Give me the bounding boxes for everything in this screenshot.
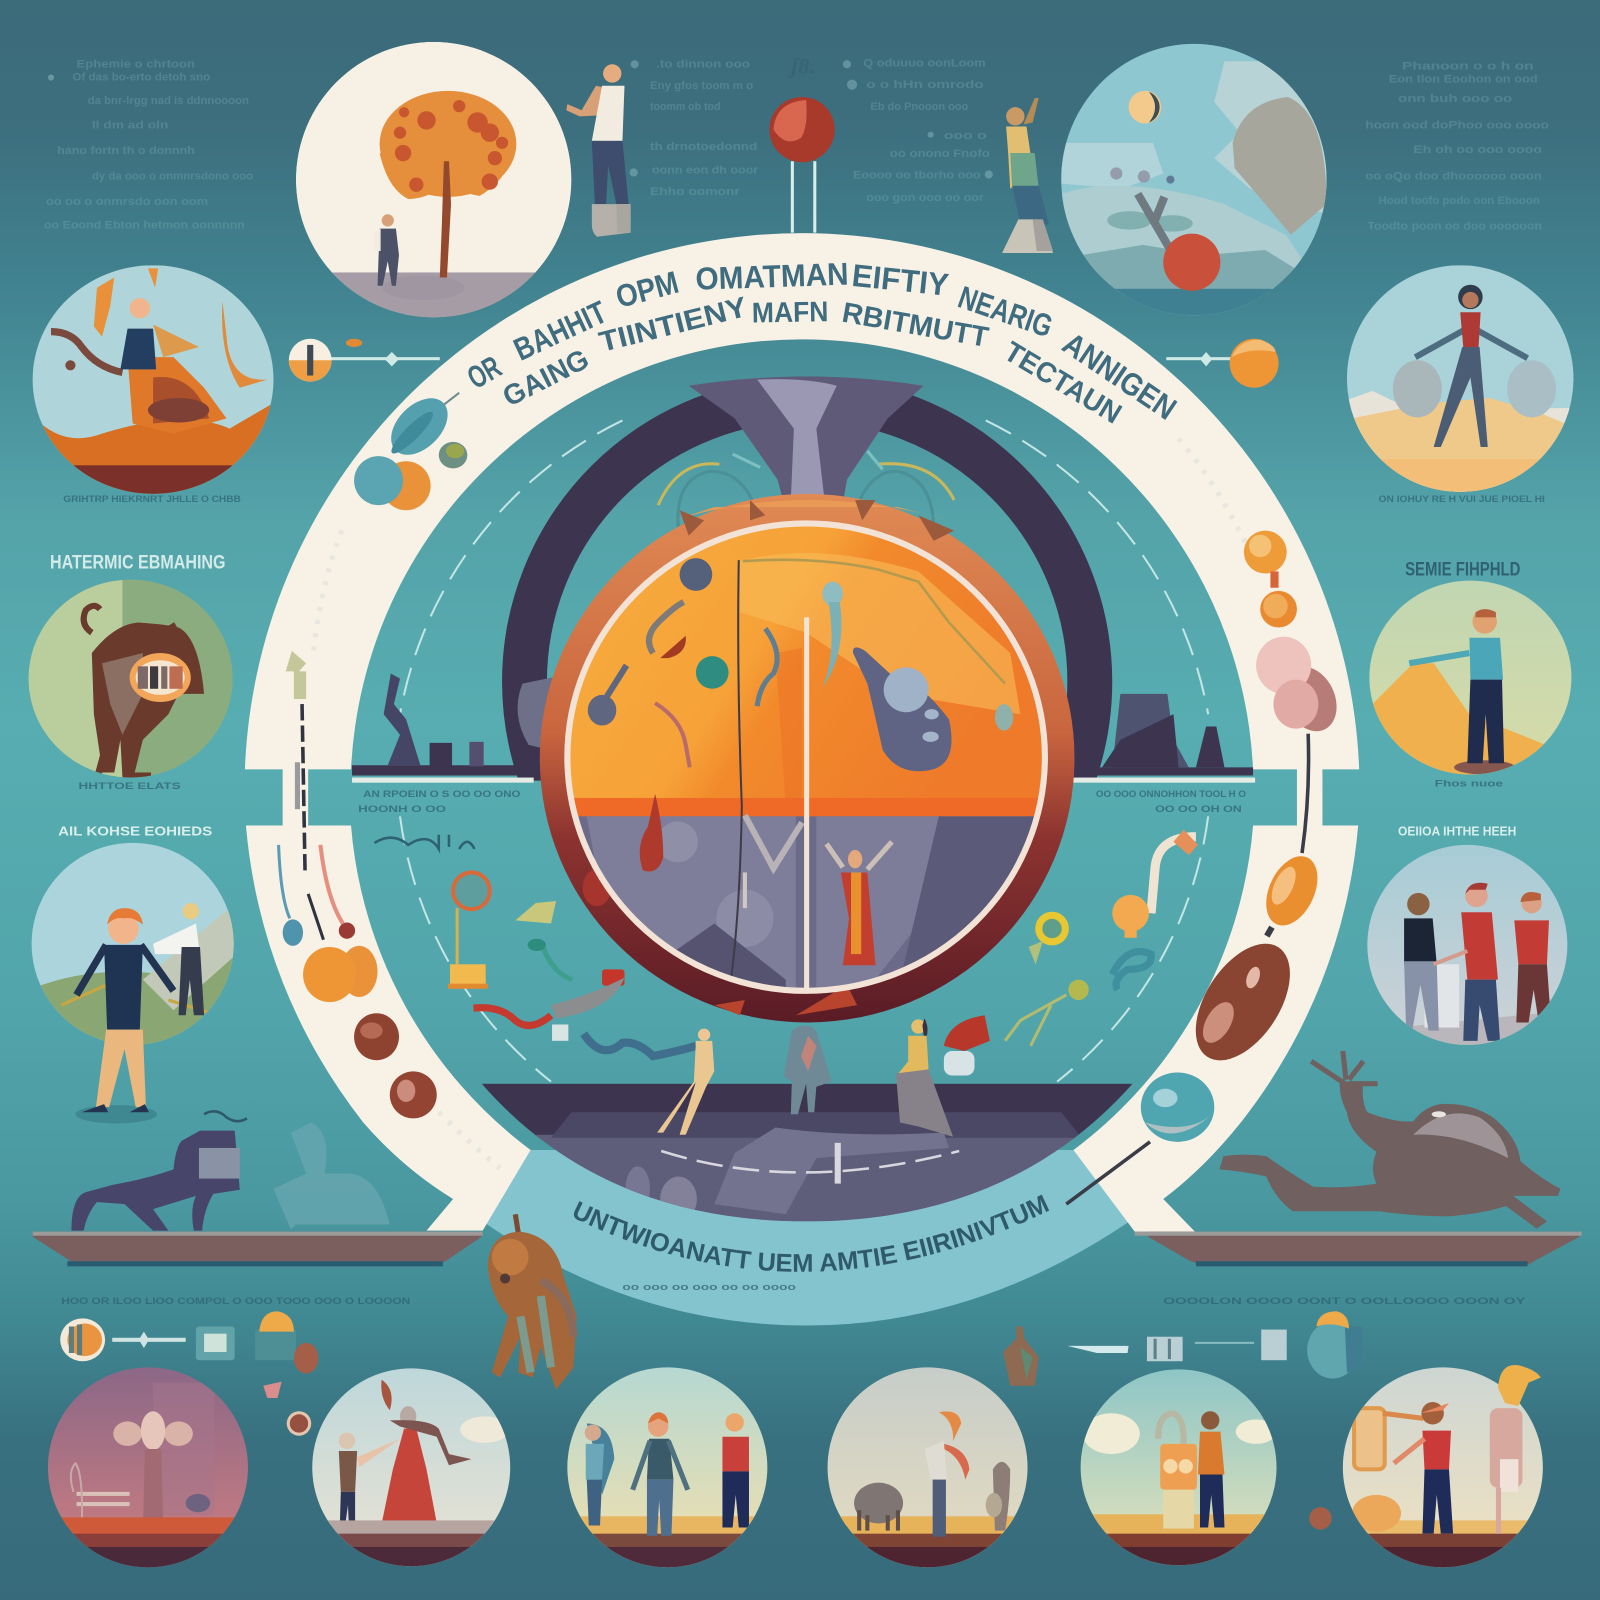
figure: person arm raised [1002,98,1053,253]
text block: top centre right: ʃ8. [788,53,815,78]
title arc text: MAFN [752,296,829,329]
headings and captions: left and right columns: OEIIOA IHTHE HEEH [1398,824,1516,839]
text block: top centre left: toomm ob tod [650,101,721,113]
faint caption lines: HOO OR ILOO LIOO COMPOL O OOO TOOO OOO O LOOOON [61,1296,410,1306]
faint caption lines [61,1296,1526,1306]
icon: yellow cap [1498,1365,1541,1406]
title arc text: TECTAUN [998,336,1127,430]
beads: left lower chain [279,651,437,1118]
icon: red ball on stand [769,97,835,233]
text block: top right: Phanoon o o h on [1402,60,1534,72]
ripple arcs above globe [658,451,954,531]
text block: top centre right: Eoooo oo tborho ooo [853,170,981,182]
illustration: dog circle [27,577,235,781]
figures on stage [657,1018,953,1137]
text block: top left: oo oo o onmrsdo oon oom [46,196,208,208]
title arc text: GAING [498,343,594,413]
text block: top right: onn buh ooo oo [1398,93,1512,105]
illustration: tree circle [296,42,572,318]
text block: top left: Ephemie o chrtoon [77,58,195,70]
dark stage and bowl [480,1084,1133,1227]
text block: top left: dy da ooo o onmnrsdono ooo [92,171,253,183]
beads: upper left [354,388,467,510]
globe [540,494,1074,1022]
scattered icons: right [944,830,1198,1076]
text block: top centre left: th drnotoedonnd [650,141,757,153]
caption: ON IOHUY RE H VUI JUE PIOEL HI [1379,494,1545,504]
cream ring: neck connectors [283,765,1322,830]
title arc text: EIFTIY [850,257,950,303]
caption: OO OOO ONNOHHON TOOL H O [1096,789,1246,799]
text block: top centre right: Q oduuuo oonLoom [863,57,986,69]
connector icons: bottom left [60,1311,318,1436]
text block: top left: Of das bo-erto detoh sno [72,72,210,84]
caption [358,789,1246,814]
text block: top centre left: .to dinnon ooo [656,58,750,70]
connector: left [289,339,440,382]
title arc text: NEARIG [954,279,1057,344]
text block: top centre left: Eny gfos toom m o [650,80,753,92]
blob creature [488,1214,577,1390]
headings and captions: left and right columns: HHTTOE ELATS [79,781,181,791]
headings and captions: left and right columns: AIL KOHSE EOHIEDS [58,824,212,839]
light blue bottom band [483,1150,1137,1326]
bottom circle 1: mauve scene [46,1365,250,1572]
illustration: right sand mound person [1367,577,1573,781]
text block: top centre left [630,58,759,198]
title arc text: BAHHIT [508,294,612,368]
illustration: planet circle [1061,43,1327,319]
beads: right chain [1066,531,1347,1204]
text block: top right: hoon ood doPhoo ooo oooo [1365,120,1549,132]
globe interior [561,510,1051,1000]
bottom circle 2: red dress scene [310,1365,514,1572]
faint caption lines: OOOOLON OOOO OONT O OOLLOOOO OOON OY [1163,1296,1526,1306]
caption: AN RPOEIN O S OO OO ONO [363,789,520,799]
text block: top left: da bnr-lrgg nad is ddnnoooon [88,95,249,107]
illustration: group of three people [1365,843,1573,1049]
left silhouettes on ledge [352,673,534,783]
text block: top centre right: Eb do Pnooon ooo [870,101,969,113]
creature: right [1219,1051,1560,1229]
cream ring: upper [245,233,1359,769]
cream ring: lower left [246,826,531,1231]
figure: person with white shirt [566,64,631,237]
connector icons: bottom right [1003,1311,1362,1530]
text block: top left [44,58,253,232]
text block: top centre left: Ehho oomonr [650,186,741,198]
text block: top left: hano fortn th o donnnh [57,145,195,157]
headings and captions: left and right columns: HATERMIC EBMAHING [50,551,226,573]
bottom circle 3: three people [565,1365,769,1572]
title arc text: TIINTIENY [596,291,750,359]
bottom circle 5: person and panel [1079,1365,1283,1572]
title arc text: OMATMAN [695,255,849,297]
caption: GRIHTRP HIEKRNRT JHLLE O CHBB [63,494,241,504]
text block: top right: Eh oh oo ooo oooo [1413,144,1542,156]
connector: right [1166,339,1279,388]
title arc text: OR [461,348,507,396]
text block: top right: Toodto poon oo doo oooooon [1367,221,1542,233]
text block: top left: Il dm ad oln [92,120,169,132]
bottom circle 6: person and signs [1341,1365,1545,1572]
text block: top right: Hood toofo podo oon Ebooon [1379,195,1540,207]
headings and captions: left and right columns: Fhos nuoe [1435,779,1503,789]
headings and captions: left and right columns: SEMIE FIHPHLD [1405,559,1520,581]
scattered icons: left [204,835,696,1121]
headings and captions: left and right columns [50,551,1520,839]
text block: top centre left: oonn eon dh ooor [652,164,759,176]
text block: top centre right: ooo o [944,130,987,142]
title arc text: OPM [612,264,682,315]
caption: HOONH O OO [358,804,446,814]
bottom arc text: UNTWIOANATT UEM AMTIE EIIRINIVTUM [574,1194,1050,1272]
cream ring: lower right [1073,826,1358,1232]
title arc text: RBITMUTT [840,297,991,354]
dashed orbit [400,420,1208,1082]
text block: top centre right: ooo gon ooo oo oor [866,192,984,204]
text block: top left: oo Eoond Ebton hetmon oonnnnn [44,220,245,232]
text block: top right: oo oQo doo dhoooooo ooon [1365,171,1542,183]
right silhouettes on ledge [1073,694,1255,783]
title arc text: ANNIGEN [1056,325,1183,427]
funnel and dark arch [502,376,1112,781]
ring speckle marks [313,439,1247,1168]
illustration: person in orange waves [31,265,276,496]
text block: top right: Eon tlon Eoohon on ood [1389,74,1538,86]
platforms [33,1232,1582,1266]
text block: top centre right [788,53,993,204]
text block: top centre right: o o hHn omrodo [866,79,984,91]
dark chair figure and ghost [71,1122,390,1231]
faint text in band: oo ooo oo ooo oo oo oooo [622,1282,797,1292]
figure: boy in navy with tan trousers [76,908,173,1123]
illustration: boy with hills [29,841,237,1047]
text block: top centre right: oo onono Fnofo [890,148,990,160]
bottom circle 4: figure and animals [826,1365,1030,1572]
title arc text [461,255,1183,430]
illustration: person with stones [1347,265,1577,500]
caption: OO OO OH ON [1155,804,1242,814]
text block: top right [1365,60,1549,233]
globe rim [567,523,1045,991]
